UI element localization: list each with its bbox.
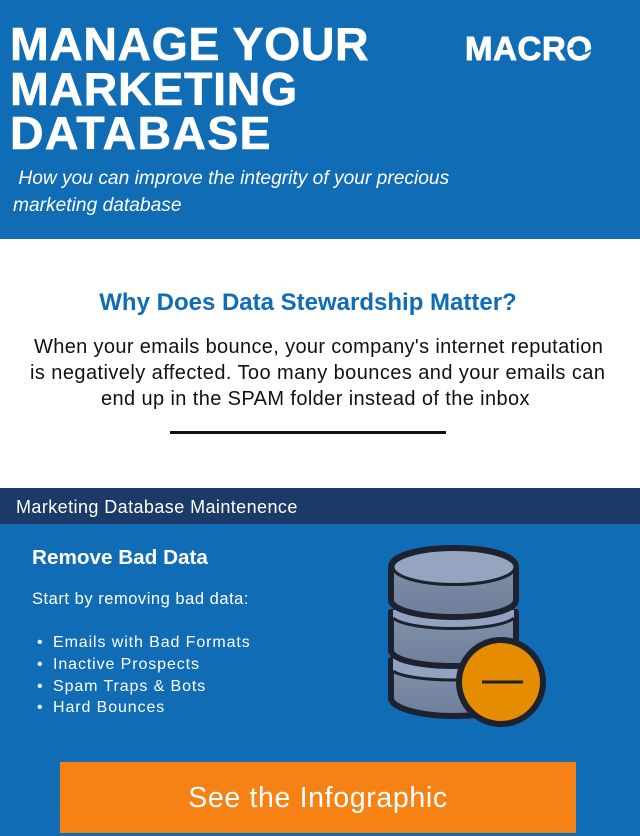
logo swoosh	[570, 47, 591, 54]
title: MARKETING	[10, 62, 298, 114]
header panel	[0, 0, 640, 239]
panel: why data stewardship matters	[0, 239, 640, 488]
middle tier	[391, 610, 516, 666]
divider line	[170, 431, 446, 434]
bullet list: •	[37, 699, 43, 716]
bullet list: Spam Traps & Bots	[53, 678, 206, 695]
body text: end up in the SPAM folder instead of the inbox	[101, 388, 530, 410]
body text: When your emails bounce, your company's internet reputation	[34, 336, 603, 358]
button: see the infographic: See the Infographic	[188, 782, 448, 814]
button: see the infographic	[60, 762, 576, 833]
section heading: Remove Bad Data	[32, 546, 208, 569]
title	[10, 18, 369, 159]
section band	[0, 488, 640, 524]
minus badge	[459, 640, 543, 724]
title: DATABASE	[10, 107, 272, 159]
bullet list: Inactive Prospects	[53, 656, 200, 673]
bullet list	[37, 634, 251, 716]
panel: remove bad data	[0, 524, 640, 836]
subtitle	[13, 168, 449, 216]
title: MANAGE YOUR	[10, 18, 369, 70]
subtitle: How you can improve the integrity of your precious	[18, 168, 449, 189]
bullet list: •	[37, 656, 43, 673]
intro text: Start by removing bad data:	[32, 590, 249, 608]
bullet list: Emails with Bad Formats	[53, 634, 251, 651]
icon: database with minus badge	[388, 545, 546, 727]
subtitle: marketing database	[13, 195, 182, 216]
top tier	[391, 548, 516, 617]
logo: MACRO	[465, 30, 593, 67]
bottom tier	[391, 658, 516, 716]
bullet list: •	[37, 678, 43, 695]
logo wordmark: MACRO	[465, 30, 593, 67]
bullet list: •	[37, 634, 43, 651]
heading: Why Does Data Stewardship Matter?	[99, 289, 517, 316]
body text	[30, 336, 605, 410]
body text: is negatively affected. Too many bounces and your emails can	[30, 362, 605, 384]
bullet list: Hard Bounces	[53, 699, 165, 716]
band label: Marketing Database Maintenence	[16, 497, 298, 517]
